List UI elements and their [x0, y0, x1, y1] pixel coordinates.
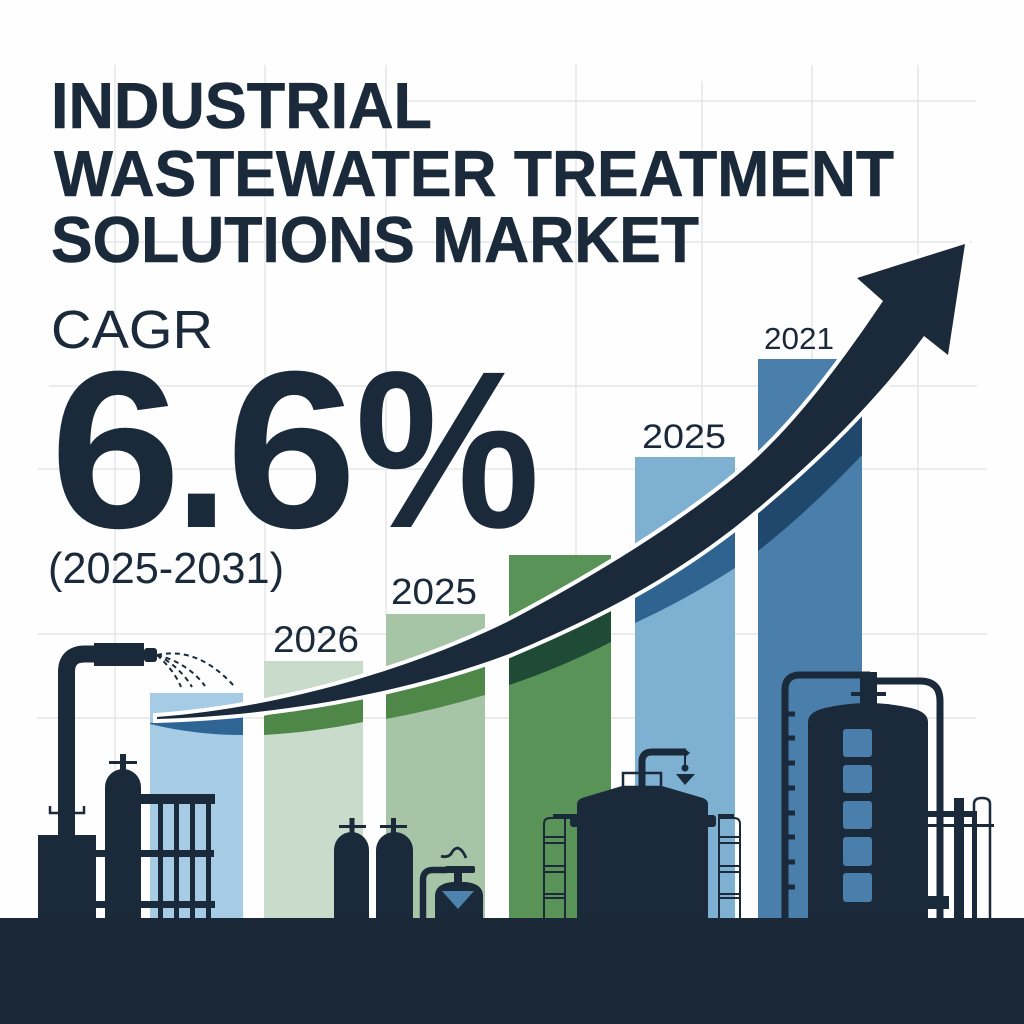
CAGR value: 6 [50, 325, 181, 575]
tower windows [843, 729, 872, 902]
year label: 2025: 2025 [391, 571, 477, 612]
left equipment: cylinder and fence [96, 754, 215, 920]
bar 1 [150, 693, 243, 918]
bar 5 [635, 457, 735, 918]
title: WASTEWATER TREATMENT [54, 137, 894, 210]
title: SOLUTIONS MARKET [51, 203, 699, 276]
bar 2 [264, 661, 363, 918]
CAGR value: % [355, 325, 540, 575]
large storage tank [544, 748, 740, 920]
forecast period: (2025-2031) [48, 544, 284, 593]
bar chart [150, 359, 862, 918]
CAGR label: CAGR [51, 300, 213, 360]
CAGR value: . [175, 325, 228, 575]
growth arrow [157, 244, 965, 719]
small filter tank [423, 848, 483, 920]
tall reactor tower [785, 672, 940, 920]
twin gas cylinders [334, 818, 413, 920]
year label: 2025 upper: 2025 [642, 418, 726, 456]
title: INDUSTRIAL [51, 69, 432, 142]
year label: 2021: 2021 [764, 321, 834, 356]
bar 3 [386, 614, 485, 918]
bar 6 [758, 359, 862, 918]
left equipment: pipe and spray [38, 643, 235, 920]
year label: 2026: 2026 [273, 619, 359, 660]
bar 4 [509, 555, 611, 918]
CAGR value: 6 [226, 325, 357, 575]
ground strip [0, 918, 1024, 1024]
title [51, 69, 894, 276]
right side pipework [928, 798, 994, 920]
